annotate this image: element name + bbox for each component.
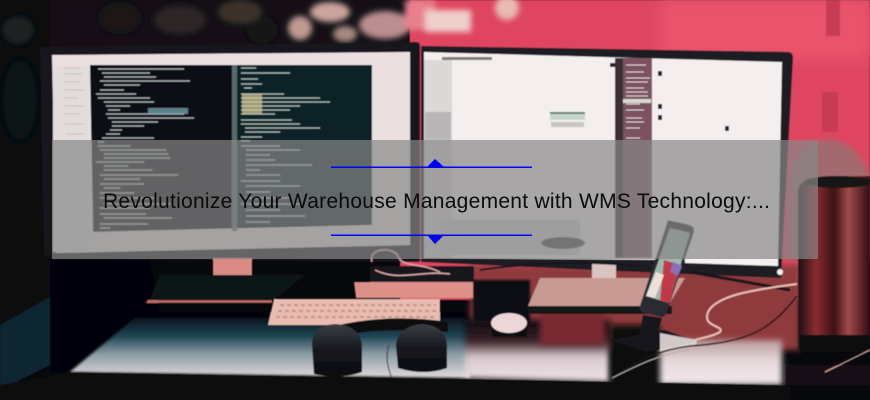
mouse bbox=[491, 313, 527, 337]
keyboard bbox=[268, 299, 440, 325]
desk surface bbox=[0, 260, 800, 400]
red wall bbox=[400, 0, 870, 300]
right lower window content bbox=[440, 220, 580, 255]
small dark marks bbox=[610, 63, 729, 131]
right monitor bbox=[421, 46, 793, 314]
top blue line with arrow bbox=[331, 159, 532, 168]
phone on stand bbox=[610, 220, 697, 352]
translucent grey title band bbox=[52, 140, 818, 259]
dark plant foliage bbox=[0, 0, 519, 330]
left monitor bbox=[40, 42, 420, 303]
left monitor stand bbox=[213, 258, 252, 281]
right monitor stand bbox=[592, 264, 616, 285]
notification card bbox=[550, 113, 585, 120]
bottom blue line with arrow bbox=[331, 234, 532, 244]
notebook and earphones bbox=[354, 250, 474, 298]
metal canister bbox=[785, 176, 870, 385]
cables bbox=[612, 284, 797, 378]
sidebar column bbox=[615, 58, 652, 258]
title: Revolutionize Your Warehouse Management with WMS Technology:... bbox=[103, 190, 770, 213]
left sidebar text lines bbox=[64, 68, 84, 134]
headphones bbox=[312, 318, 448, 378]
code editor panels bbox=[90, 65, 372, 232]
